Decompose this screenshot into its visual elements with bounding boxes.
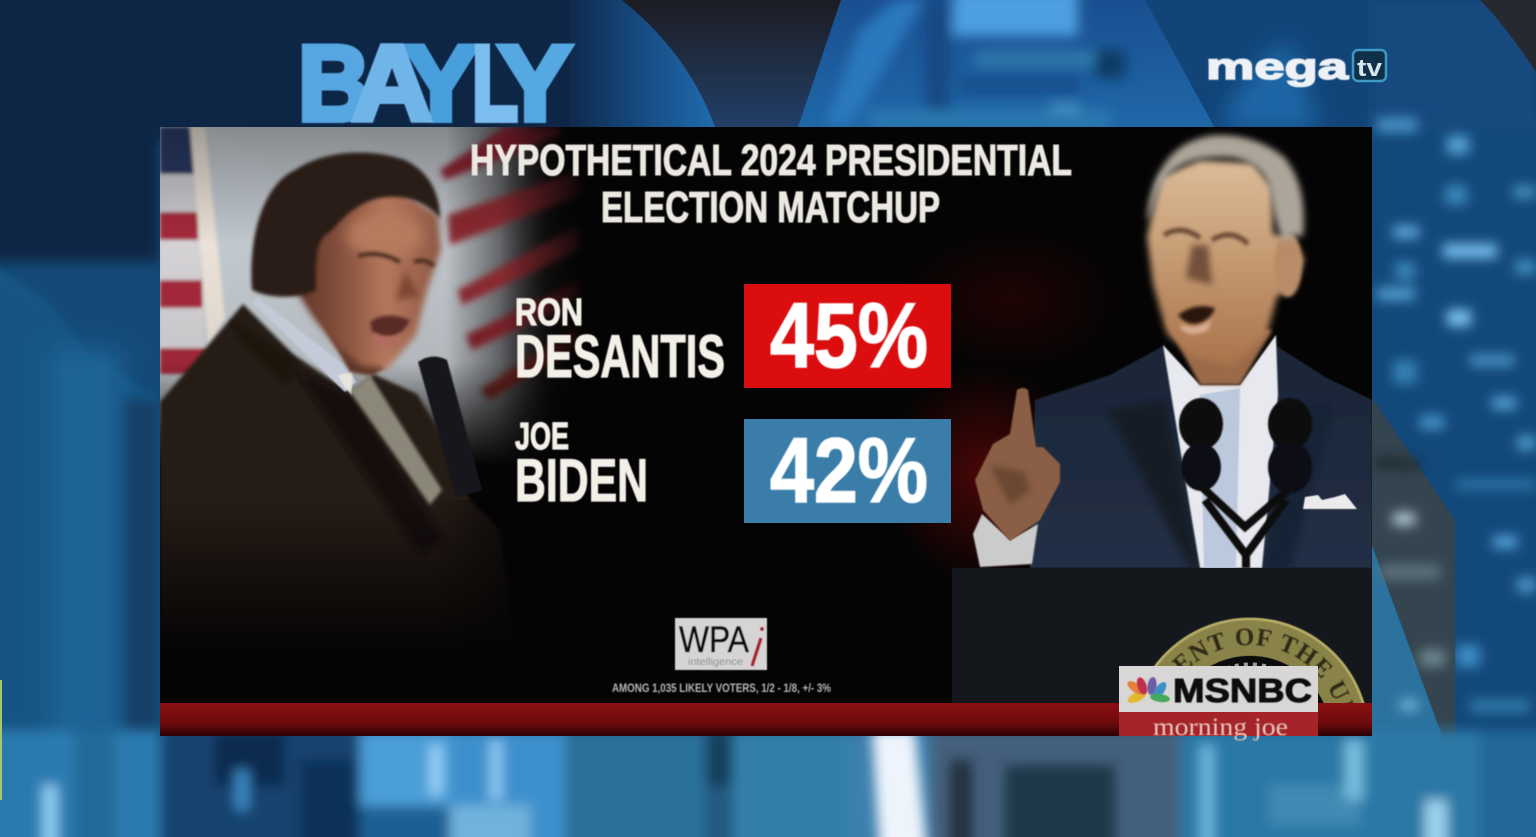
headline: ELECTION MATCHUP: [601, 183, 940, 232]
podium and seal: [952, 568, 1372, 703]
logo: BAYLY: [298, 23, 572, 143]
fade to black: [160, 537, 517, 703]
podium and seal: DENT OF THE UNI: [1171, 628, 1354, 703]
logo: WPA intelligence: WPA: [679, 619, 749, 660]
flag right: [440, 127, 580, 400]
eyes: [1164, 230, 1248, 244]
microphones: [1179, 398, 1312, 568]
bottom city strip: [0, 730, 1536, 837]
logo: MSNBC morning joe: morning joe: [1153, 714, 1288, 741]
logo: mega tv: tv: [1357, 55, 1383, 82]
hair: [1147, 135, 1304, 242]
logo: WPA intelligence: [675, 618, 767, 670]
logo: BAYLY: Y: [498, 23, 572, 143]
logo: BAYLY: Y: [404, 23, 478, 143]
jacket: [1030, 345, 1372, 568]
headline: [470, 136, 1072, 232]
name: Ron DeSantis: RON: [515, 292, 583, 334]
name: Ron DeSantis: [515, 292, 725, 390]
right city: [1372, 100, 1536, 837]
logo: BAYLY: B: [298, 23, 370, 143]
right side red glow: [908, 252, 1086, 568]
microphone: [418, 356, 482, 498]
value bar: 45%: 45%: [770, 285, 928, 387]
raised hand: [975, 388, 1060, 541]
right of tower: [1145, 0, 1536, 130]
curved blue shape: [570, 0, 716, 130]
main video panel: [160, 127, 1372, 742]
name: Joe Biden: JOE: [515, 416, 569, 458]
left photo backdrop with flag: [160, 127, 580, 459]
tie: [350, 375, 442, 505]
logo: mega tv: [1206, 46, 1386, 87]
neck: [318, 318, 386, 378]
red footer strip: [160, 703, 1372, 736]
suit: [160, 302, 501, 612]
logo: MSNBC morning joe: MSNBC: [1173, 672, 1312, 709]
top right corner: [1480, 0, 1536, 72]
row: Ron DeSantis: [515, 284, 951, 390]
name: Joe Biden: [515, 416, 648, 514]
top left dark sky: [0, 0, 640, 262]
grey overlay shape right: [1372, 398, 1455, 770]
face: [296, 190, 441, 369]
source note: AMONG 1,035 LIKELY VOTERS, 1/2 - 1/8, +/- 3%: [612, 683, 831, 695]
logo: mega tv: mega: [1206, 46, 1349, 87]
shirt: [1163, 335, 1278, 568]
mouth: [370, 315, 410, 336]
logo: WPA intelligence: intelligence: [688, 657, 743, 668]
lower light wedge: [1372, 545, 1455, 837]
logo: MSNBC morning joe: [1119, 666, 1318, 741]
photo: Ron DeSantis: [160, 150, 501, 612]
headline: HYPOTHETICAL 2024 PRESIDENTIAL: [470, 136, 1072, 185]
logo: BAYLY: A: [352, 23, 432, 143]
name: Ron DeSantis: DESANTIS: [515, 323, 725, 390]
hair: [251, 153, 440, 297]
neck: [1165, 320, 1272, 385]
shirt cuff: [973, 514, 1038, 567]
row: Joe Biden: [515, 416, 951, 523]
photo: Joe Biden: [973, 135, 1372, 568]
name: Joe Biden: BIDEN: [515, 447, 648, 514]
logo: BAYLY: L: [472, 23, 518, 143]
eyes: [358, 254, 434, 266]
head: [1147, 160, 1304, 367]
dark gap: [622, 0, 841, 130]
collar: [252, 298, 356, 392]
central tower: [797, 0, 1216, 130]
icon: NBC peacock: [1125, 676, 1170, 705]
value bar: 42%: 42%: [770, 420, 928, 522]
tie: [1200, 388, 1240, 568]
mouth: [1178, 306, 1215, 324]
window lights: [1377, 118, 1536, 828]
pocket square: [1303, 494, 1357, 509]
flag left: [160, 127, 225, 374]
